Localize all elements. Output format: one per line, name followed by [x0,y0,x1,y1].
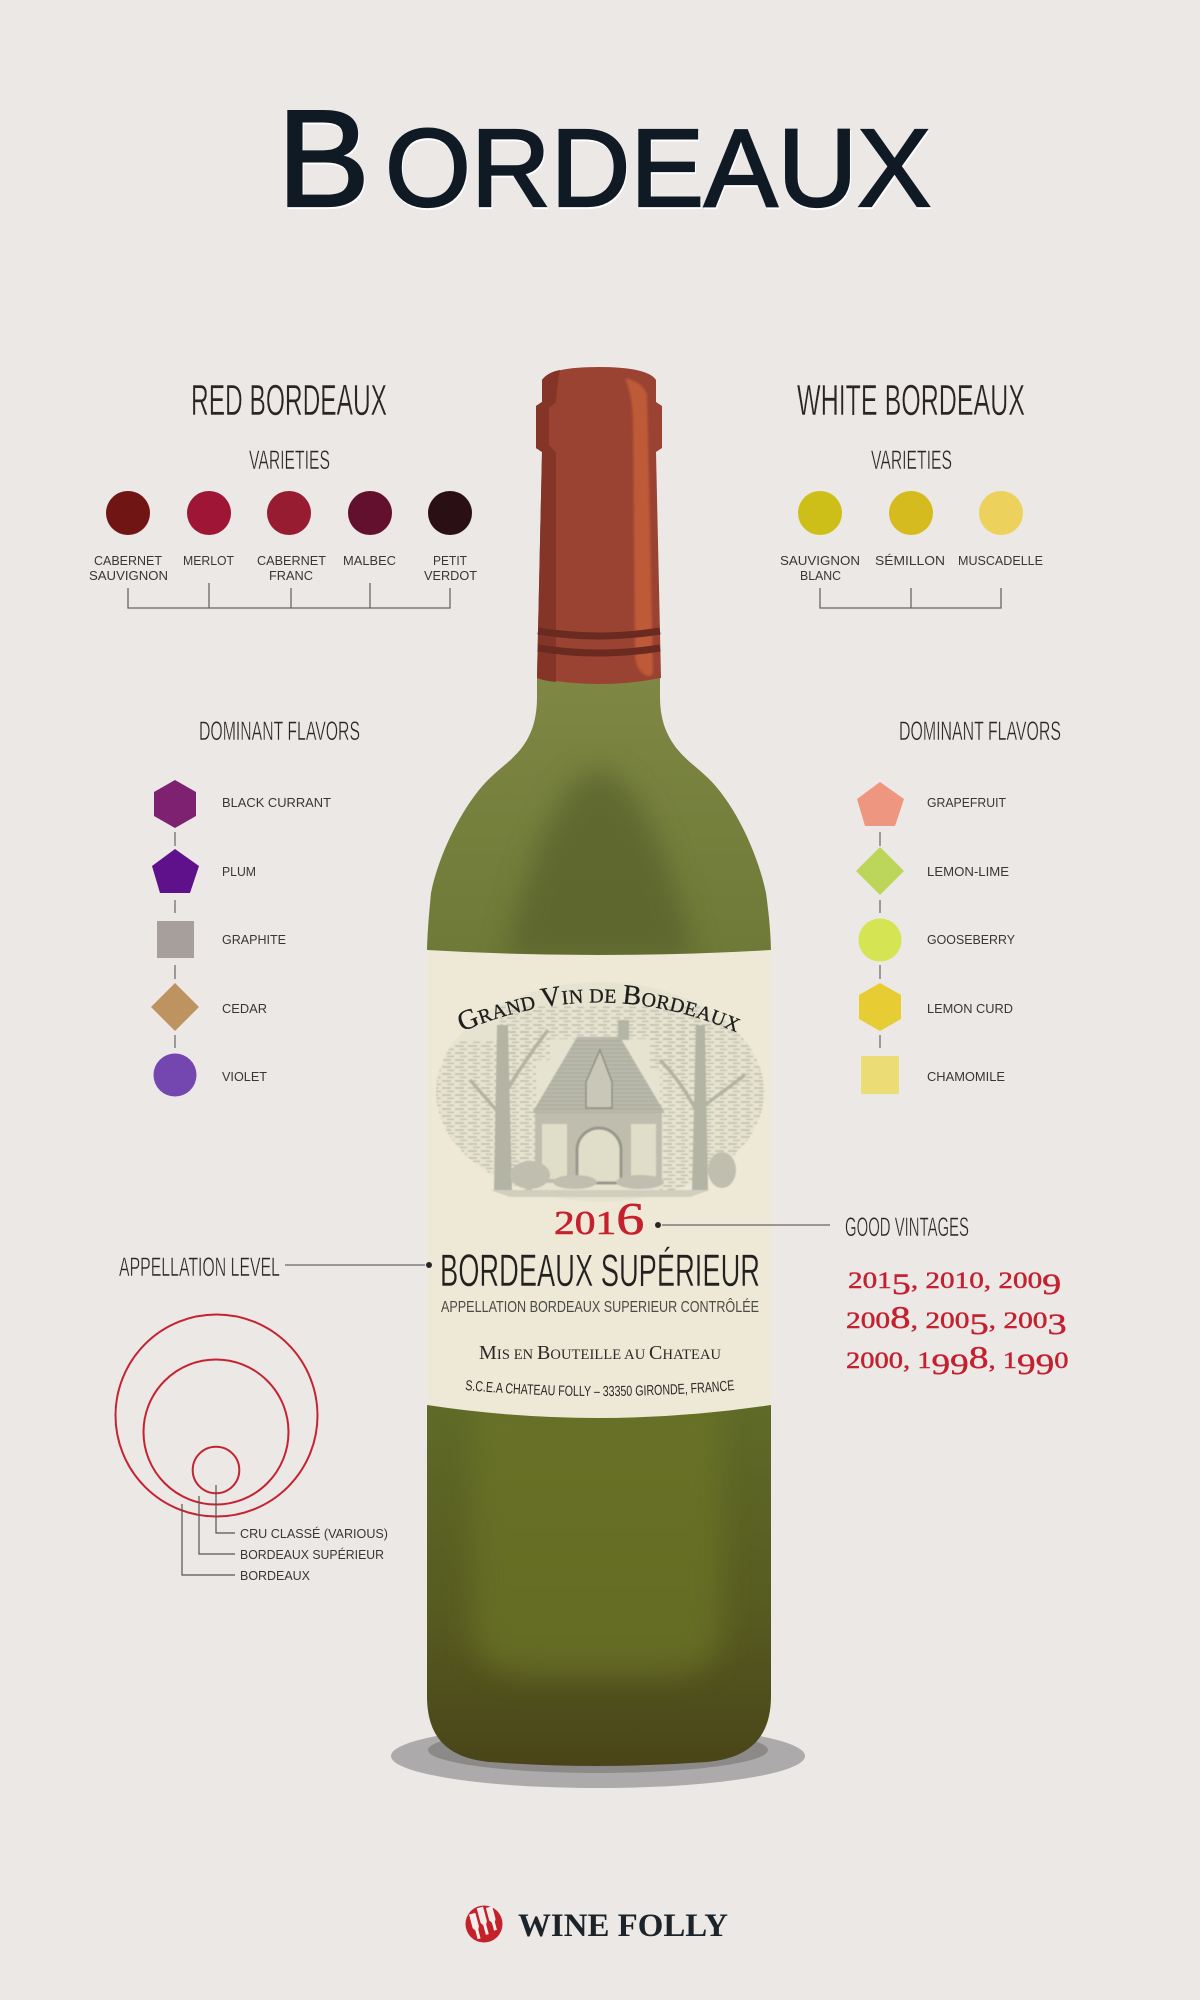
label: lemon curd: LEMON CURD [927,1001,1013,1016]
icon: black currant hexagon [154,780,196,828]
icon: violet circle [154,1054,196,1096]
wine label [427,950,771,1418]
label: violet: VIOLET [222,1069,267,1084]
bottle inner shading [505,770,695,960]
icon: lemon-lime diamond [856,847,904,895]
leader lines [182,1485,235,1575]
label paper [427,950,771,1418]
grape names: SAUVIGNON [89,568,168,583]
dormer [586,1050,612,1108]
icon: plum pentagon [152,849,199,893]
gate arch [577,1128,621,1183]
vintage years list: 3 [1048,1308,1067,1341]
heading: dominant flavors: DOMINANT FLAVORS [899,716,1061,746]
logo wordmark: WINE FOLLY [518,1908,728,1944]
blend bracket [820,588,1001,608]
label: black currant: BLACK CURRANT [222,795,331,810]
grape names: FRANC [269,568,313,583]
hedges and ground [490,1152,736,1197]
callout: good vintages [655,1212,1068,1381]
grape names: SAUVIGNON [780,553,860,568]
subheading: varieties: VARIETIES [871,445,952,475]
label: chamomile: CHAMOMILE [927,1069,1005,1084]
grape names: CABERNET [257,553,326,568]
level labels: BORDEAUX [240,1568,310,1583]
vintage years list: 2008, 200 [846,1299,969,1335]
panel: red dominant flavors [151,716,360,1096]
bottle inner glow [472,1400,722,1675]
label: grapefruit: GRAPEFRUIT [927,795,1006,810]
icon: lemon curd hexagon [859,983,901,1031]
grape names: CABERNET [94,553,162,568]
vintage years list: 2000, 1 [846,1348,932,1373]
label text: grand vin de bordeaux: GRAND VIN DE BORDEAUX [458,984,740,1032]
vintage years list: , 200 [989,1307,1048,1333]
label text: appellation: APPELLATION BORDEAUX SUPERIEUR CONTRÔLÉE [441,1299,759,1316]
grape colour dots [798,491,1023,535]
heading: white bordeaux: WHITE BORDEAUX [797,376,1025,425]
heading: appellation level: APPELLATION LEVEL [119,1252,280,1282]
icon: gooseberry circle [858,918,902,962]
vintage leader line [655,1222,830,1228]
chimney [618,1020,629,1040]
icon: chamomile square [861,1056,899,1094]
grape names: MERLOT [183,553,234,568]
nested appellation circles [116,1314,318,1516]
vintage years list: 8 [969,1340,989,1375]
label text: vintage 2016: 2016 [554,1194,644,1245]
bottle glass upper [427,678,771,955]
vintage years list: 5 [969,1308,989,1341]
vintage years list: , 1 [989,1348,1017,1373]
subheading: varieties: VARIETIES [249,445,330,475]
heading: dominant flavors: DOMINANT FLAVORS [199,716,360,746]
label: cedar: CEDAR [222,1001,267,1016]
heading: red bordeaux: RED BORDEAUX [191,376,387,425]
label: graphite: GRAPHITE [222,932,286,947]
icon: cedar diamond [151,983,199,1031]
vintage years list: 99 [932,1348,969,1381]
level labels [240,1526,388,1583]
icon: grapefruit pentagon [857,782,904,826]
grape names: MUSCADELLE [958,553,1043,568]
bottle glass lower [427,1400,771,1766]
label: plum: PLUM [222,864,256,879]
appellation leader line [285,1262,432,1268]
grape names: VERDOT [424,568,477,583]
bottle [391,367,805,1788]
chateau walls [535,1113,662,1183]
title: B [277,82,370,236]
flavor connector ticks [879,832,881,1048]
grape names: SÉMILLON [875,553,945,568]
panel: red bordeaux varieties [89,376,477,608]
capsule [536,367,662,684]
grape names: MALBEC [343,553,396,568]
level labels: BORDEAUX SUPÉRIEUR [240,1547,384,1562]
chateau roof [532,1037,665,1113]
title: ORDEAUX [385,107,931,230]
vintage years list: 0 [1054,1348,1068,1373]
grape colour dots [106,491,472,535]
level labels: CRU CLASSÉ (VARIOUS) [240,1526,388,1541]
vintage years list: 5 [892,1268,911,1301]
title [277,82,931,236]
vintage years list: 201 [848,1268,892,1293]
grape names: PETIT [433,553,467,568]
flavor connector ticks [174,832,176,1048]
blend bracket [128,583,450,608]
icon: logo roundel with bottles [466,1904,502,1942]
tree trunks [494,1025,512,1190]
panel: white dominant flavors [856,716,1061,1094]
grape names: BLANC [800,568,841,583]
label text: mis en bouteille: MIS EN BOUTEILLE AU CHATEAU [479,1342,722,1364]
heading: good vintages: GOOD VINTAGES [845,1212,969,1242]
vintage years list: 99 [1017,1348,1054,1381]
panel: white bordeaux varieties [780,376,1043,608]
bottle shadow [391,1724,805,1788]
logo: wine folly [466,1904,728,1944]
vintage years list [846,1268,1068,1381]
panel: appellation level [116,1252,432,1583]
label illustration: chateau and trees [436,1006,764,1198]
label: gooseberry: GOOSEBERRY [927,932,1015,947]
label text: producer: S.C.E.A CHATEAU FOLLY – 33350 GIRONDE, FRANCE [466,1380,734,1396]
grape names [89,553,477,583]
icon: graphite square [157,921,194,958]
grape names [780,553,1043,583]
label text: bordeaux superieur: BORDEAUX SUPÉRIEUR [440,1245,760,1296]
vintage years list: 9 [1042,1268,1061,1301]
vintage years list: , 2010, 200 [911,1268,1042,1293]
label: lemon-lime: LEMON-LIME [927,864,1009,879]
